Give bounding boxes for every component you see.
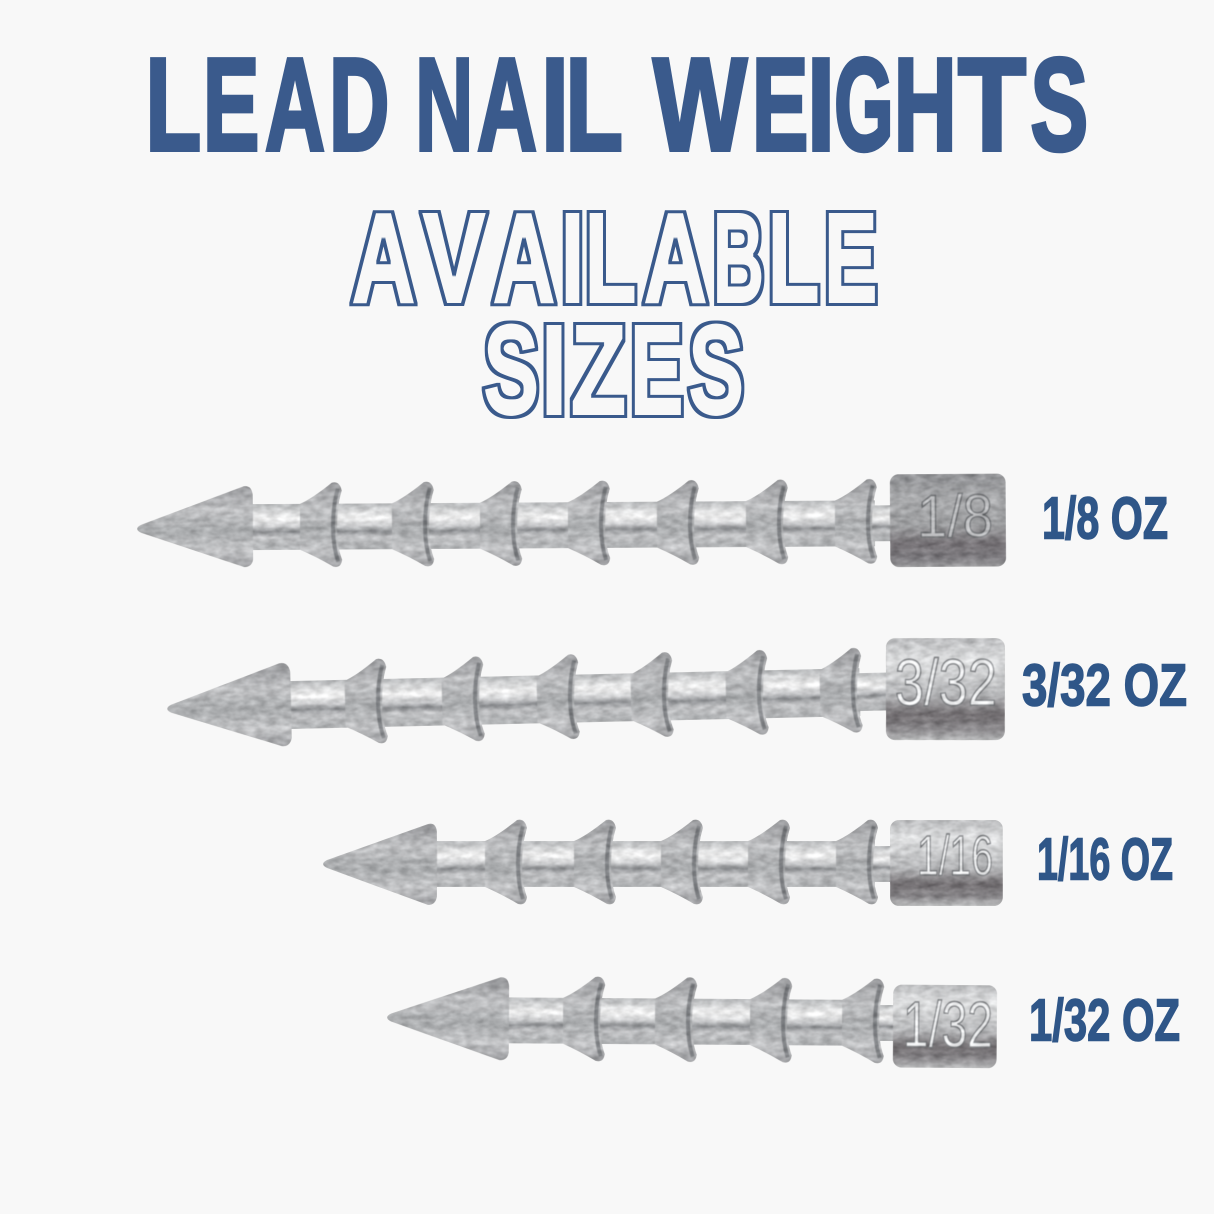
title: L xyxy=(565,31,621,178)
title: L xyxy=(145,31,201,178)
subtitle: available sizes: A xyxy=(352,188,416,328)
tip head xyxy=(166,663,292,749)
stamped size: 1/32 xyxy=(903,988,993,1061)
subtitle: available sizes: S xyxy=(483,300,539,440)
title: A xyxy=(477,31,537,178)
stamped size: 3/32 xyxy=(895,645,997,719)
subtitle: available sizes: E xyxy=(824,188,878,328)
end cap xyxy=(886,638,1005,740)
subtitle: available sizes: I xyxy=(541,300,567,440)
tip head xyxy=(387,976,509,1060)
nail weight: 1/16 oz xyxy=(323,820,1003,906)
tip head xyxy=(323,824,437,905)
title: T xyxy=(958,31,1026,178)
title: E xyxy=(752,31,808,178)
title: E xyxy=(203,31,259,178)
nail weight: 1/8 oz xyxy=(137,474,1006,572)
subtitle: available sizes: S xyxy=(688,300,744,440)
subtitle: available sizes: Z xyxy=(571,300,626,440)
subtitle: available sizes: L xyxy=(584,188,636,328)
tip head xyxy=(137,486,253,568)
title: I xyxy=(541,31,569,178)
title: G xyxy=(834,31,894,178)
nail weight: 3/32 oz xyxy=(166,635,1007,759)
subtitle: available sizes: A xyxy=(644,188,708,328)
title: D xyxy=(329,31,389,178)
stamped size: 1/16 xyxy=(917,824,993,888)
subtitle: available sizes: E xyxy=(630,300,684,440)
nail weight: 1/32 oz xyxy=(387,975,997,1068)
title: A xyxy=(265,31,325,178)
subtitle: available sizes xyxy=(352,188,878,440)
title: N xyxy=(415,31,473,178)
end cap xyxy=(893,985,997,1068)
title: W xyxy=(653,31,747,178)
end cap xyxy=(890,820,1003,906)
subtitle: available sizes: B xyxy=(712,188,764,328)
title: H xyxy=(894,31,957,178)
stamped size: 1/8 xyxy=(917,483,993,550)
end cap xyxy=(890,474,1006,567)
title: S xyxy=(1030,31,1088,178)
subtitle: available sizes: V xyxy=(422,188,486,328)
subtitle: available sizes: I xyxy=(560,188,584,328)
title: I xyxy=(807,31,835,178)
subtitle: available sizes: A xyxy=(492,188,556,328)
subtitle: available sizes: L xyxy=(768,188,820,328)
